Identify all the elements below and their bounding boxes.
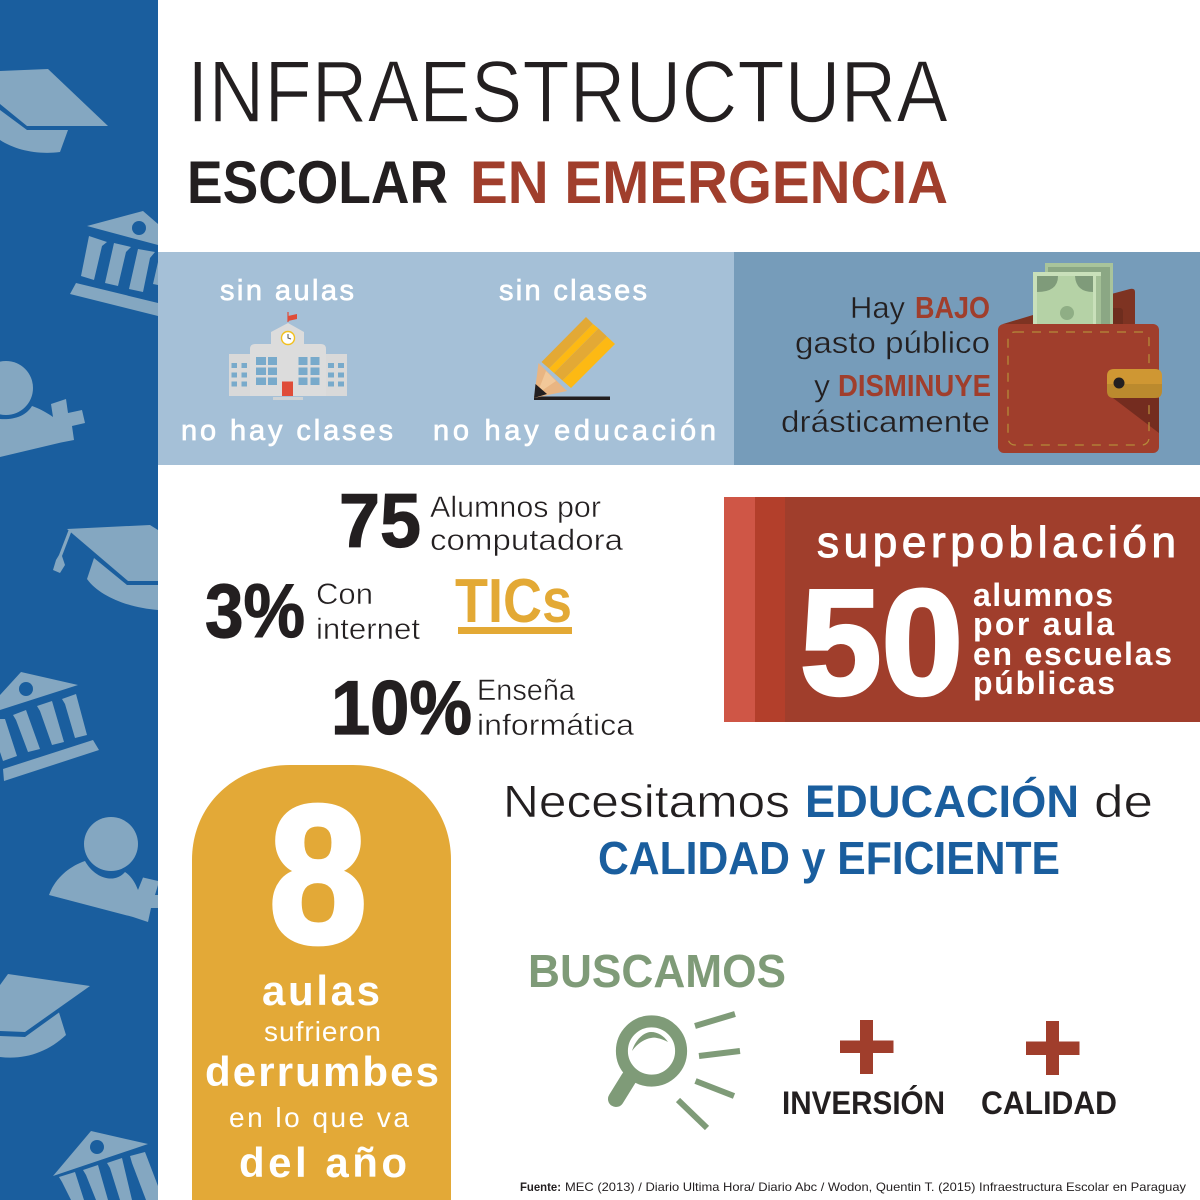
text: aulas sufrieron derrumbes: [205, 967, 439, 1186]
text: aulas sufrieron derrumbes: del año: [239, 1139, 407, 1186]
icon: pencil: [534, 317, 615, 400]
stat: 50: 50: [800, 558, 963, 726]
icon: graduation cap 2: [53, 525, 158, 610]
panel: sin aulas, sin clases: [158, 252, 734, 465]
stat: 75 alumnos por computadora: 75: [339, 479, 421, 564]
text: inversión: INVERSIÓN: [782, 1085, 945, 1121]
title: EN EMERGENCIA: [470, 149, 948, 216]
panel: superpoblación: [724, 497, 1200, 726]
text: alumnos por aula: [973, 577, 1172, 701]
panel: gasto público: [734, 252, 1200, 465]
icon: bank 2: [0, 672, 99, 781]
heading: necesitamos educación: CALIDAD y EFICIENTE: [598, 832, 1060, 884]
icon: magnifying glass: [616, 1014, 740, 1128]
title: INFRAESTRUCTURA: [187, 42, 948, 141]
stat: 10% enseña informática: Enseña: [477, 674, 575, 707]
icon: plus calidad: [1026, 1021, 1080, 1075]
stat: 8: 8: [269, 765, 367, 984]
stat: 10% enseña informática: [331, 666, 634, 751]
text: calidad: CALIDAD: [981, 1085, 1117, 1121]
stat: 3% con internet: Con: [316, 578, 373, 611]
stat: 3% con internet: 3%: [205, 569, 305, 654]
text: sin clases: sin clases: [499, 275, 647, 307]
heading: TICs: TICs: [455, 567, 572, 636]
stat: 3% con internet: [205, 569, 421, 654]
text: sin aulas: sin aulas: [220, 275, 354, 307]
stat: 75 alumnos por computadora: computadora: [430, 524, 623, 557]
text: aulas sufrieron derrumbes: aulas: [262, 967, 380, 1014]
text: alumnos por aula: por aula: [973, 606, 1114, 642]
text: aulas sufrieron derrumbes: en lo que va: [229, 1102, 409, 1133]
icon: person with plus 2: [49, 817, 158, 922]
icon: graduation cap 1: [0, 69, 108, 153]
text: alumnos por aula: en escuelas: [973, 636, 1172, 672]
icon: plus inversión: [840, 1020, 894, 1074]
icon: wallet with money: [998, 263, 1162, 453]
text: gasto público: gasto público: [795, 325, 990, 360]
text: gasto público: BAJO: [915, 290, 990, 325]
panel: blue sidebar with icons: [0, 0, 158, 1200]
text: gasto público: DISMINUYE: [838, 368, 991, 403]
text: alumnos por aula: públicas: [973, 665, 1115, 701]
text: gasto público: Hay: [850, 290, 905, 325]
stat: 75 alumnos por computadora: [339, 479, 623, 564]
icon: bank 3: [53, 1131, 158, 1200]
text: no hay clases: no hay clases: [181, 415, 393, 447]
heading: necesitamos educación: [503, 776, 1153, 884]
text: aulas sufrieron derrumbes: derrumbes: [205, 1048, 439, 1095]
text: aulas sufrieron derrumbes: sufrieron: [264, 1016, 381, 1047]
text: gasto público: drásticamente: [781, 404, 990, 439]
title: [187, 42, 948, 216]
stat: 10% enseña informática: 10%: [331, 666, 472, 751]
heading: necesitamos educación: EDUCACIÓN: [805, 776, 1079, 827]
text: fuente: Fuente:: [520, 1180, 561, 1194]
heading: buscamos: BUSCAMOS: [528, 945, 786, 997]
icon: bank 1: [70, 211, 158, 316]
text: no hay educación: no hay educación: [433, 415, 716, 447]
icon: person with plus 1: [0, 361, 85, 457]
heading: necesitamos educación: Necesitamos: [503, 776, 790, 827]
panel: 8 aulas: [192, 765, 451, 1200]
stat: 3% con internet: internet: [316, 613, 421, 646]
text: alumnos por aula: alumnos: [973, 577, 1113, 613]
text: gasto público: y: [814, 368, 831, 403]
title: ESCOLAR: [187, 149, 448, 216]
icon: school building: [229, 312, 347, 400]
icon: graduation cap 3: [0, 974, 90, 1058]
stat: 10% enseña informática: informática: [477, 709, 634, 742]
text: fuente: MEC (2013) / Diario Ultima Hora/ Diario Abc / Wodon, Quentin T. (2015) Infraestructura Escolar en Paraguay: [565, 1180, 1186, 1194]
heading: superpoblación: superpoblación: [817, 518, 1176, 567]
heading: necesitamos educación: de: [1094, 776, 1153, 827]
stat: 75 alumnos por computadora: Alumnos por: [430, 491, 601, 524]
text: gasto público: [781, 290, 991, 439]
